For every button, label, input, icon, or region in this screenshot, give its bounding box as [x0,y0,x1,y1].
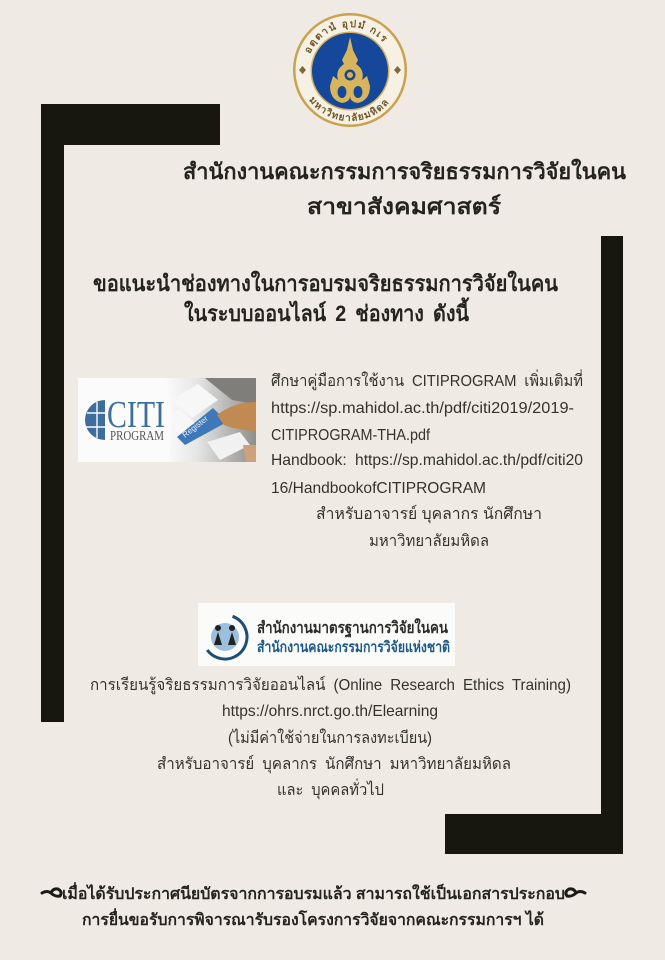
icon: right ornament [566,889,585,896]
text: CITI Program handbook links: https://sp.mahidol.ac.th/pdf/citi2019/2019- [271,400,574,417]
heading: office name: สำนักงานคณะกรรมการจริยธรรมการวิจัยในคน [183,158,626,184]
frame: top-left black bracket [41,104,220,722]
text: closing note on certificate use: การยื่นขอรับการพิจารณารับรองโครงการวิจัยจากคณะกรรมการฯ ได้ [82,908,544,929]
heading: office name: สาขาสังคมศาสตร์ [307,194,501,219]
image: Office of Human Research Standards logo banner: สำนักงานมาตรฐานการวิจัยในคน [257,618,448,638]
text: closing note on certificate use: เมื่อได้รับประกาศนียบัตรจากการอบรมแล้ว สามารถใช้เป็นเอกสารประกอบ [62,882,565,903]
heading: recommendation of online training channels [93,270,558,326]
text: CITI Program handbook links: สำหรับอาจารย์ บุคลากร นักศึกษา [316,504,542,524]
text: online research ethics training details: การเรียนรู้จริยธรรมการวิจัยออนไลน์ (Online Research Ethics Training) [90,675,571,695]
text: online research ethics training details: สำหรับอาจารย์ บุคลากร นักศึกษา มหาวิทยาลัยมหิดล [157,754,511,774]
text: online research ethics training details: (ไม่มีค่าใช้จ่ายในการลงทะเบียน) [228,728,432,747]
image: CITI Program register banner [78,378,256,462]
frame: bottom-right black bracket [445,236,623,854]
icon: left ornament [42,889,61,896]
text: online research ethics training details [90,675,571,800]
heading: recommendation of online training channels: ขอแนะนำช่องทางในการอบรมจริยธรรมการวิจัยในคน [93,270,558,296]
text: CITI Program handbook links [271,369,583,550]
text: online research ethics training details: https://ohrs.nrct.go.th/Elearning [222,703,438,720]
image: Office of Human Research Standards logo banner [197,603,455,666]
image: Office of Human Research Standards logo banner: สำนักงานคณะกรรมการวิจัยแห่งชาติ [257,638,450,656]
heading: office name [183,158,626,219]
text: CITI Program handbook links: มหาวิทยาลัยมหิดล [369,533,489,550]
text: CITI Program handbook links: ศึกษาคู่มือการใช้งาน CITIPROGRAM เพิ่มเติมที่ [271,369,583,391]
text: online research ethics training details: และ บุคคลทั่วไป [277,778,384,800]
text: closing note on certificate use [62,882,565,929]
logo: Mahidol University seal: มหาวิทยาลัยมหิดล [309,96,389,122]
image: CITI Program register banner: CITI [107,394,165,436]
text: CITI Program handbook links: CITIPROGRAM-THA.pdf [271,427,430,444]
logo: Mahidol University seal: อตฺตานํ อุปมํ กเร [306,20,388,54]
image: CITI Program register banner: Register [181,414,210,440]
image: CITI Program register banner: PROGRAM [110,429,164,444]
text: CITI Program handbook links: Handbook: https://sp.mahidol.ac.th/pdf/citi20 [271,452,583,469]
logo: Mahidol University seal [293,13,407,127]
heading: recommendation of online training channels: ในระบบออนไลน์ 2 ช่องทาง ดังนี้ [184,297,470,326]
text: CITI Program handbook links: 16/HandbookofCITIPROGRAM [271,480,486,497]
